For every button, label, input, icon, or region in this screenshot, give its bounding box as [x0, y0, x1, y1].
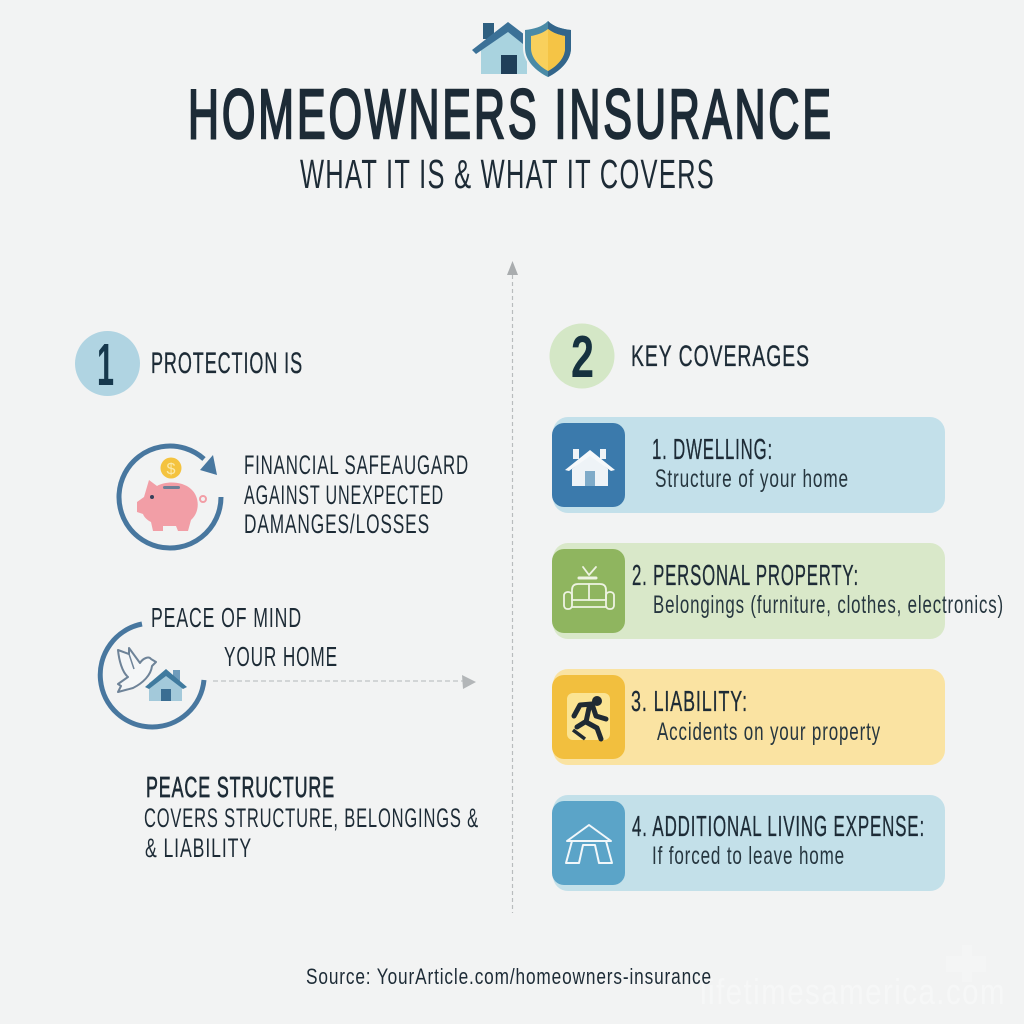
text: additional living expense: If forced to leave home [652, 842, 845, 870]
icon: piggy bank in circular arrow [119, 446, 221, 548]
section 2 badge: 2 [571, 324, 594, 390]
panel: protection [75, 331, 479, 863]
watermark [700, 945, 1006, 1012]
icon: sofa and tv [552, 549, 625, 633]
heading: key coverages: KEY COVERAGES [631, 340, 810, 373]
text: financial safeguard: DAMANGES/LOSSES [244, 509, 430, 539]
text: peace of mind: PEACE OF MIND [151, 602, 302, 633]
text: liability: Accidents on your property [657, 718, 881, 746]
text: personal property [632, 560, 1004, 619]
text: liability [631, 686, 881, 746]
icon: slipping person [552, 675, 625, 759]
text: dwelling: Structure of your home [655, 465, 849, 493]
dashed arrow [213, 675, 476, 689]
icon: house and shield logo [472, 19, 573, 79]
text: financial safeguard: AGAINST UNEXPECTED [244, 480, 444, 510]
text: liability: 3. LIABILITY: [631, 686, 748, 718]
icon: dove and home in circle [100, 624, 204, 727]
text: your home: YOUR HOME [224, 641, 338, 672]
panel: key coverages [550, 324, 1004, 891]
subtitle: WHAT IT IS & WHAT IT COVERS [300, 151, 715, 197]
section 1 badge [75, 331, 140, 398]
text: financial safeguard: FINANCIAL SAFEAUGARD [244, 450, 469, 480]
text: peace structure: PEACE STRUCTURE [146, 772, 335, 804]
card: liability [552, 669, 945, 765]
card: personal property [552, 543, 1004, 639]
text: peace structure: & LIABILITY [145, 833, 252, 863]
section 2 badge [550, 324, 614, 390]
text: personal property: 2. PERSONAL PROPERTY: [632, 560, 859, 592]
card: dwelling [552, 417, 945, 513]
icon: tent [552, 801, 625, 885]
icon: piggy bank in circular arrow: $ [166, 461, 176, 478]
vertical divider arrow [507, 261, 518, 913]
card: additional living expense [552, 795, 945, 891]
section 1 badge: 1 [97, 332, 114, 398]
text: peace structure [144, 772, 479, 863]
source line: Source: YourArticle.com/homeowners-insurance [306, 964, 712, 989]
icon: house [552, 423, 625, 507]
text: dwelling [652, 434, 849, 493]
text: dwelling: 1. DWELLING: [652, 434, 773, 466]
text: financial safeguard [244, 450, 469, 539]
text: additional living expense [632, 811, 925, 870]
text: peace structure: COVERS STRUCTURE, BELONGINGS & [144, 803, 479, 833]
heading: protection is: PROTECTION IS [151, 347, 303, 380]
